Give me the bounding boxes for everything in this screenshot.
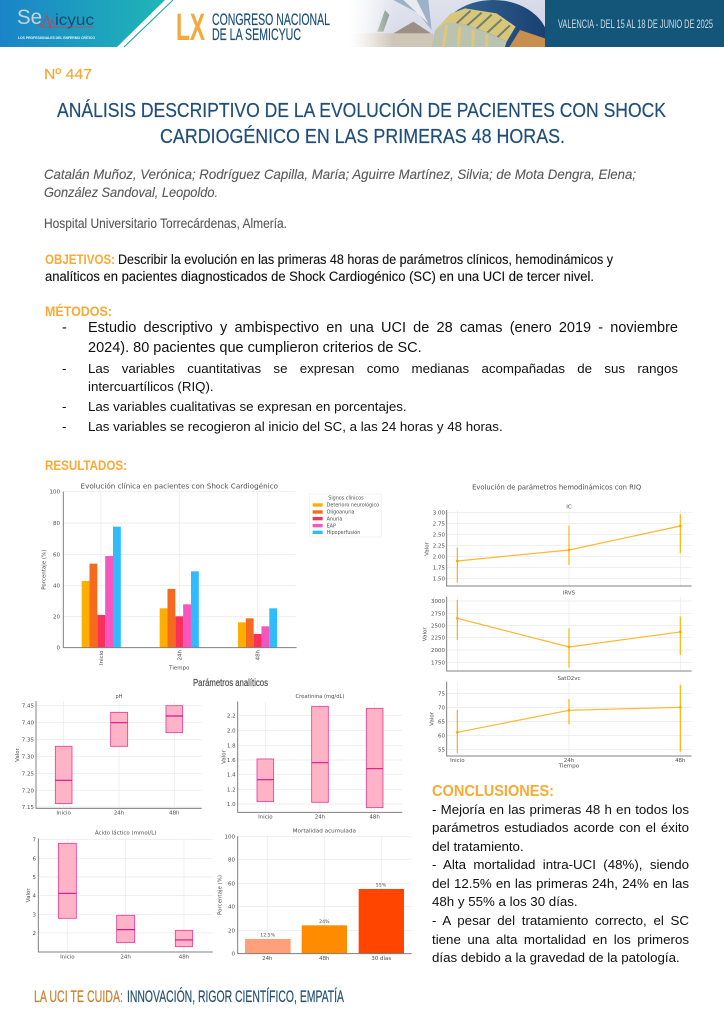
line chart: SatO2vc — [430, 676, 692, 770]
box plot: creatinine: 48h — [369, 815, 380, 821]
line chart: IC: 2.50 — [433, 533, 446, 539]
analytic parameters heading: Parámetros analíticos — [193, 678, 268, 689]
conclusions heading: CONCLUSIONES: — [432, 783, 554, 800]
box plot: pH: 7.40 — [22, 721, 35, 727]
box plot: pH: 7.45 — [22, 704, 35, 710]
line chart: SatO2vc: 24h — [564, 758, 575, 764]
legend: EAP — [327, 523, 336, 529]
footer slogan: INNOVACIÓN, RIGOR CIENTÍFICO, EMPATÍA — [127, 987, 344, 1006]
header photo: Valencia architecture — [357, 0, 545, 47]
box plots: pH and lactic acid — [15, 694, 213, 960]
line chart: IC: Valor — [424, 541, 430, 556]
box plot: creatinine: Inicio — [258, 815, 273, 821]
line chart: SatO2vc: 65 — [438, 720, 446, 726]
bar chart: cumulative mortality: 100 — [225, 834, 236, 840]
box plot: lactic acid: 2 — [32, 931, 36, 937]
bar chart: cumulative mortality: Mortalidad acumulada — [293, 829, 356, 835]
affiliation: Hospital Universitario Torrecárdenas, Almería. — [44, 215, 287, 231]
legend: Oligoanuria — [327, 510, 355, 516]
bar chart: clinical evolution: 80 — [53, 521, 61, 527]
line chart: IRVS: 2250 — [431, 636, 445, 642]
title — [57, 99, 667, 148]
box plot: lactic acid: Inicio — [60, 954, 75, 960]
conclusions text: - A pesar del tratamiento correcto, el SC — [432, 913, 689, 928]
bar chart: cumulative mortality: 20 — [228, 928, 236, 934]
line chart: SatO2vc: SatO2vc — [557, 676, 581, 682]
objectives: Describir la evolución en las primeras 48 horas de parámetros clínicos, hemodinámicos y — [118, 252, 613, 267]
bar chart: clinical evolution: 20 — [53, 614, 61, 620]
box plot: creatinine: 1.8 — [227, 743, 236, 749]
bar chart: clinical evolution: 0 — [56, 646, 60, 652]
abstract number: Nº 447 — [44, 66, 92, 83]
box plot: pH: pH — [116, 694, 123, 700]
line charts: hemodynamic parameters — [422, 483, 692, 770]
line chart: IRVS: 2750 — [431, 611, 445, 617]
congress title: LX — [176, 7, 205, 49]
line chart: IRVS: 3000 — [431, 599, 445, 605]
logo panel: Semicyuc: Se — [17, 6, 42, 29]
methods list: - — [62, 399, 66, 414]
results heading: RESULTADOS: — [45, 457, 127, 473]
conclusions text — [432, 802, 689, 965]
methods list: Estudio descriptivo y ambispectivo en una UCI de 28 camas (enero 2019 - noviembre — [88, 320, 678, 336]
conclusions text: días debido a la gravedad de la patología. — [432, 950, 680, 965]
box plot: pH: 7.20 — [22, 788, 35, 794]
objectives: analíticos en pacientes diagnosticados de Shock Cardiogénico (SC) en una UCI de tercer nivel. — [45, 269, 594, 284]
methods heading: MÉTODOS: — [45, 303, 112, 319]
header banner — [0, 0, 724, 48]
box plot: creatinine: 24h — [315, 815, 326, 821]
methods list — [62, 320, 678, 434]
congress title: DE LA SEMICYUC — [212, 25, 301, 44]
box plot: creatinine: 2.2 — [227, 714, 236, 720]
objectives: OBJETIVOS: — [45, 252, 115, 267]
bar chart: clinical evolution: Tiempo — [168, 666, 190, 672]
bar chart: cumulative mortality: Porcentaje (%) — [218, 875, 224, 915]
box plot: lactic acid: 24h — [120, 954, 131, 960]
box plot: creatinine: Valor — [221, 749, 227, 764]
bar chart: cumulative mortality: 30 días — [371, 955, 391, 962]
line chart: IC: 3.00 — [433, 511, 446, 517]
line chart: IC: 1.75 — [433, 565, 446, 571]
authors: González Sandoval, Leopoldo. — [44, 184, 218, 200]
line chart: IC: 2.25 — [433, 544, 446, 550]
conclusions text: - Alta mortalidad intra-UCI (48%), siendo — [432, 857, 689, 872]
box plot: lactic acid: 48h — [179, 954, 190, 960]
methods list: 2024). 80 pacientes que cumplieron criterios de SC. — [88, 340, 422, 356]
conclusions text: del 12.5% en las primeras 24h, 24% en las — [432, 876, 689, 891]
box plot: creatinine: 1.4 — [227, 773, 236, 779]
line chart: IRVS: 2000 — [431, 648, 445, 654]
box plot: lactic acid: 3 — [32, 912, 36, 918]
bar chart: cumulative mortality: 80 — [228, 858, 236, 864]
logo panel: Semicyuc: icyuc — [55, 12, 94, 29]
line chart: IRVS: Valor — [422, 627, 428, 641]
conclusions text: parámetros estudiados acorde con el éxito — [432, 820, 689, 835]
line chart: SatO2vc: 60 — [438, 734, 446, 740]
bar chart: clinical evolution: 40 — [53, 583, 61, 589]
line chart: SatO2vc: Valor — [430, 711, 436, 726]
bar chart: cumulative mortality: 0 — [231, 952, 235, 958]
box plot: creatinine: 1.2 — [227, 787, 236, 793]
line chart: SatO2vc: 75 — [438, 692, 446, 698]
box plot: creatinine: Creatinina (mg/dL) — [296, 694, 344, 700]
box plot: pH: 7.30 — [22, 755, 35, 761]
bar chart: cumulative mortality: 60 — [228, 881, 236, 887]
box plot: creatinine: 2.0 — [227, 729, 236, 735]
box plot: lactic acid: 5 — [32, 875, 36, 881]
methods list: - — [62, 320, 67, 336]
line chart: IRVS: 2500 — [431, 624, 445, 630]
bar chart: cumulative mortality — [218, 829, 412, 962]
box plot: lactic acid: 6 — [32, 856, 36, 862]
box plot: lactic acid — [26, 830, 213, 960]
legend — [309, 494, 381, 537]
box plot: pH: 7.15 — [22, 805, 35, 811]
bar chart: clinical evolution — [42, 482, 381, 672]
box plot: pH: 24h — [114, 811, 125, 817]
line chart: SatO2vc: 55 — [438, 747, 446, 753]
box plot: lactic acid: 7 — [32, 837, 36, 843]
box plot: lactic acid: Ácido láctico (mmol/L) — [95, 830, 156, 837]
bar chart: cumulative mortality: 24% — [319, 919, 330, 925]
box plot: creatinine: 1.0 — [227, 802, 236, 808]
authors: Catalán Muñoz, Verónica; Rodríguez Capilla, María; Aguirre Martínez, Silvia; de Mota Dengra, Elena; — [44, 166, 636, 182]
line chart: SatO2vc: 70 — [438, 706, 446, 712]
methods list: intercuartílicos (RIQ). — [88, 379, 214, 394]
logo panel: Semicyuc — [0, 0, 173, 47]
box plot: pH: 7.25 — [22, 771, 35, 777]
box plot: pH: Inicio — [56, 811, 72, 817]
footer slogan — [34, 987, 344, 1006]
line chart: IRVS: 1750 — [431, 660, 445, 666]
legend: Signos clínicos — [328, 495, 364, 502]
line chart: SatO2vc: Tiempo — [558, 764, 580, 770]
line chart: IC: IC — [566, 505, 572, 511]
conclusions text: - Mejoría en las primeras 48 h en todos los — [432, 802, 689, 817]
line chart: IC — [424, 505, 692, 586]
bar chart: clinical evolution: 60 — [53, 552, 61, 558]
chart title: Evolución de parámetros hemodinámicos con RIQ — [472, 483, 641, 491]
methods list: Las variables cualitativas se expresan en porcentajes. — [88, 399, 407, 414]
box plot: creatinine: 1.6 — [227, 758, 236, 764]
box plot: lactic acid: Valor — [26, 888, 32, 902]
box plot: pH: 48h — [169, 811, 180, 817]
box plot: pH: Valor — [15, 747, 21, 762]
line chart: IRVS: IRVS — [563, 590, 576, 596]
box plot and mortality chart — [218, 694, 412, 962]
bar chart: clinical evolution: Inicio — [99, 650, 105, 665]
congress title — [176, 7, 330, 49]
line chart: IC: 2.00 — [433, 554, 446, 560]
conclusions text: tiene una alta mortalidad en los primeros — [432, 932, 689, 947]
bar chart: cumulative mortality: 55% — [376, 883, 387, 889]
bar chart: clinical evolution: 24h — [177, 649, 183, 660]
box plot: pH — [15, 694, 202, 817]
legend: Deterioro neurológico — [327, 502, 379, 509]
line chart: SatO2vc: 48h — [675, 758, 686, 764]
bar chart: clinical evolution: Porcentaje (%) — [42, 550, 48, 590]
box plot: pH: 7.35 — [22, 738, 35, 744]
line chart: SatO2vc: Inicio — [450, 758, 465, 764]
methods list: Las variables se recogieron al inicio del SC, a las 24 horas y 48 horas. — [88, 419, 503, 434]
legend: Anuria — [327, 516, 342, 522]
date panel — [545, 0, 724, 47]
box plot: creatinine — [221, 694, 402, 821]
methods list: - — [62, 419, 66, 434]
conclusions text: 48h y 55% a los 30 días. — [432, 894, 578, 909]
authors — [44, 166, 636, 200]
bar chart: cumulative mortality: 48h — [319, 956, 330, 962]
bar chart: clinical evolution: 100 — [50, 490, 61, 496]
box plot: lactic acid: 4 — [32, 894, 36, 900]
objectives — [45, 252, 613, 284]
bar chart: cumulative mortality: 24h — [262, 956, 273, 962]
legend: Hipoperfusión — [327, 529, 360, 536]
bar chart: cumulative mortality: 12.5% — [260, 933, 276, 939]
footer slogan: LA UCI TE CUIDA: — [34, 987, 123, 1006]
title: CARDIOGÉNICO EN LAS PRIMERAS 48 HORAS. — [160, 125, 565, 148]
line chart: IRVS — [422, 590, 692, 671]
bar chart: clinical evolution: 48h — [256, 649, 262, 660]
methods list: Las variables cuantitativas se expresan como medianas acompañadas de sus rangos — [88, 361, 678, 376]
logo panel: Semicyuc: LOS PROFESIONALES DEL ENFERMO CRÍTICO — [18, 35, 95, 40]
line chart: IC: 1.50 — [433, 576, 446, 582]
methods list: - — [62, 361, 66, 376]
bar chart: clinical evolution: Evolución clínica en pacientes con Shock Cardiogénico — [81, 482, 279, 491]
conclusions text: del tratamiento. — [432, 839, 524, 854]
bar chart: cumulative mortality: 40 — [228, 905, 236, 911]
line chart: IC: 2.75 — [433, 522, 446, 528]
congress title: CONGRESO NACIONAL — [212, 10, 330, 29]
